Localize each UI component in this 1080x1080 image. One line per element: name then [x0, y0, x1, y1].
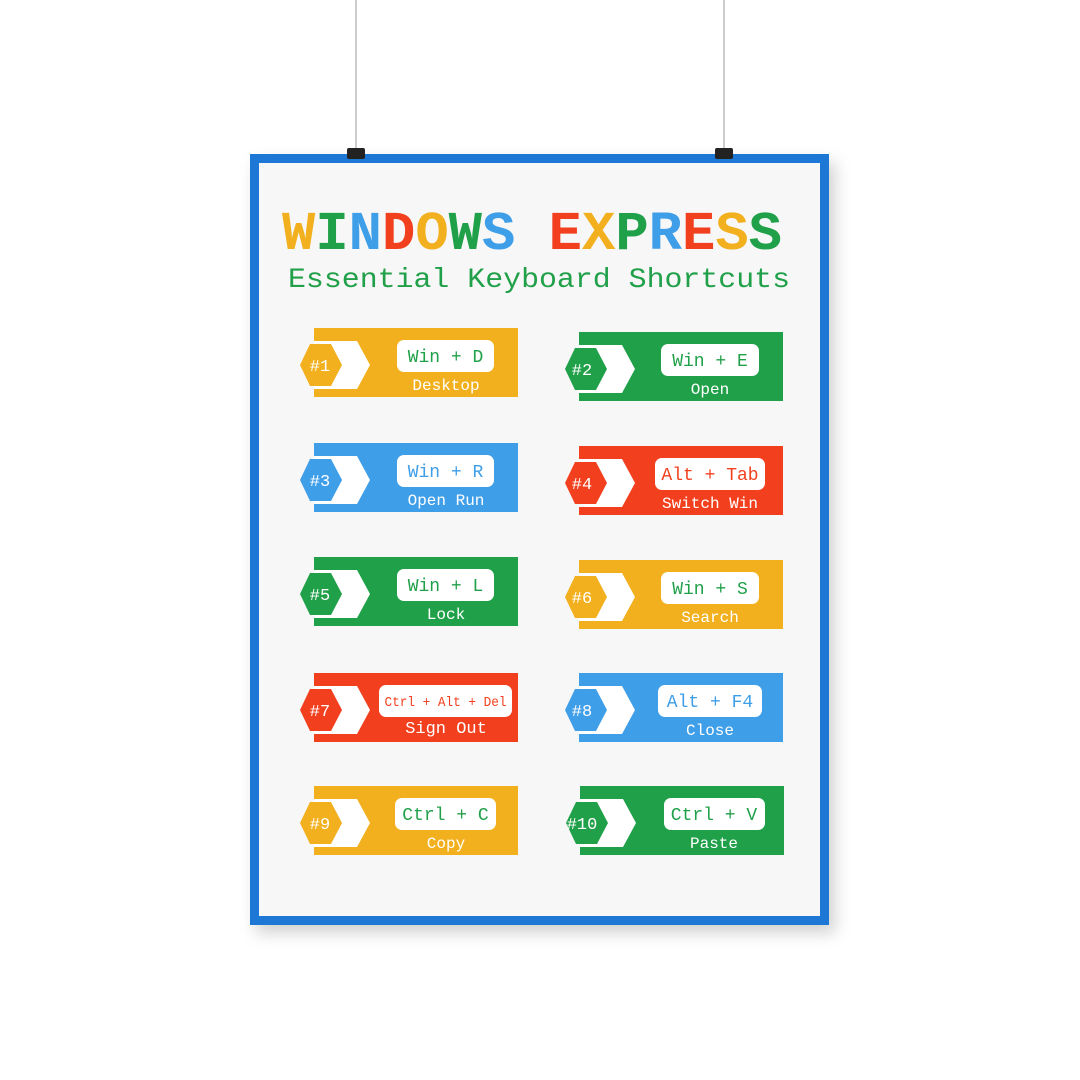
card #4: #4 [572, 476, 592, 495]
hanging strings [356, 0, 724, 150]
card #8 [565, 673, 783, 742]
title: WINDOWS EXPRESS [282, 203, 782, 266]
card #1: Desktop [412, 377, 480, 395]
card #5: #5 [310, 587, 330, 606]
card #1 [300, 328, 518, 397]
card #6 [565, 560, 783, 629]
card #6: Win + S [672, 580, 748, 600]
card #3: Open Run [408, 492, 484, 510]
card #2: #2 [572, 362, 592, 381]
card #10: #10 [567, 816, 597, 835]
card #5 [300, 557, 518, 626]
poster [250, 154, 829, 925]
card #7 [300, 673, 518, 742]
card #2 [565, 332, 783, 401]
card #3: Win + R [408, 463, 483, 483]
card #7: Ctrl + Alt + Del [384, 695, 506, 711]
card #3: #3 [310, 473, 330, 492]
card #6: #6 [572, 590, 592, 609]
card #4: Alt + Tab [661, 466, 759, 486]
card #7: #7 [310, 703, 330, 722]
card #9 [300, 786, 518, 855]
card #2: Win + E [672, 352, 748, 372]
card #9: Ctrl + C [402, 806, 489, 826]
card #9: #9 [310, 816, 330, 835]
card #5: Win + L [408, 577, 483, 597]
card #8: #8 [572, 703, 592, 722]
card #1: Win + D [408, 348, 483, 368]
card #10: Ctrl + V [671, 806, 757, 826]
card #4 [565, 446, 783, 515]
clips [347, 148, 733, 159]
card #10: Paste [690, 835, 738, 853]
card #9: Copy [427, 835, 466, 853]
card #1: #1 [310, 358, 330, 377]
card #10 [566, 786, 784, 855]
card #5: Lock [427, 606, 465, 624]
card #8: Close [686, 722, 734, 740]
card #6: Search [681, 609, 739, 627]
card #7: Sign Out [405, 720, 487, 739]
card #8: Alt + F4 [667, 693, 753, 713]
card #3 [300, 443, 518, 512]
card #4: Switch Win [662, 495, 758, 513]
subtitle: Essential Keyboard Shortcuts [288, 265, 790, 296]
card #2: Open [691, 381, 729, 399]
